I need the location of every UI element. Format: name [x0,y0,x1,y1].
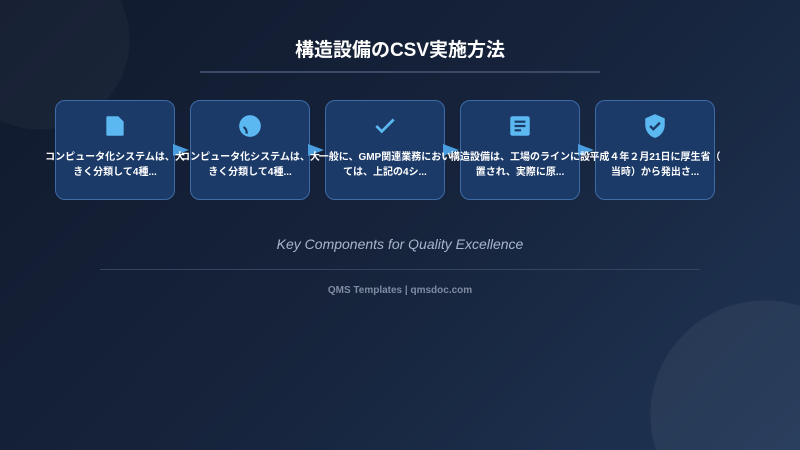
card text 1 [45,151,185,178]
icon: document [106,116,124,136]
card text 5 [589,151,721,178]
card text 1: コンピュータ化システムは、大 [45,152,185,163]
card text 4 [450,151,590,178]
title: 構造設備のCSV実施方法 [295,40,505,61]
card text 4: 構造設備は、工場のラインに設 [450,152,590,163]
card text 5: 当時）から発出さ... [611,167,699,178]
icon: shield check [645,114,665,138]
card 4 [460,100,580,200]
card text 4: 置され、実際に原... [476,167,564,178]
subtitle: Key Components for Quality Excellence [277,236,523,252]
arrow 1 [173,144,189,156]
arrow 3 [443,144,459,156]
card text 2: きく分類して4種... [208,167,292,178]
card text 3 [319,151,451,178]
card text 3: ては、上記の4シ... [343,167,427,178]
arrow 2 [308,144,324,156]
card text 5: 平成４年２月21日に厚生省（ [589,152,721,163]
icon: check [376,118,394,134]
card text 2: コンピュータ化システムは、大 [180,152,320,163]
card 3 [325,100,445,200]
footer: QMS Templates | qmsdoc.com [328,285,472,296]
card 5 [595,100,715,200]
card text 2 [180,151,320,178]
card 1 [55,100,175,200]
icon: notes [510,116,530,136]
card text 3: 一般に、GMP関連業務におい [319,152,451,163]
arrow 4 [578,144,594,156]
icon: globe [239,115,261,137]
card text 1: きく分類して4種... [73,167,157,178]
card 2 [190,100,310,200]
